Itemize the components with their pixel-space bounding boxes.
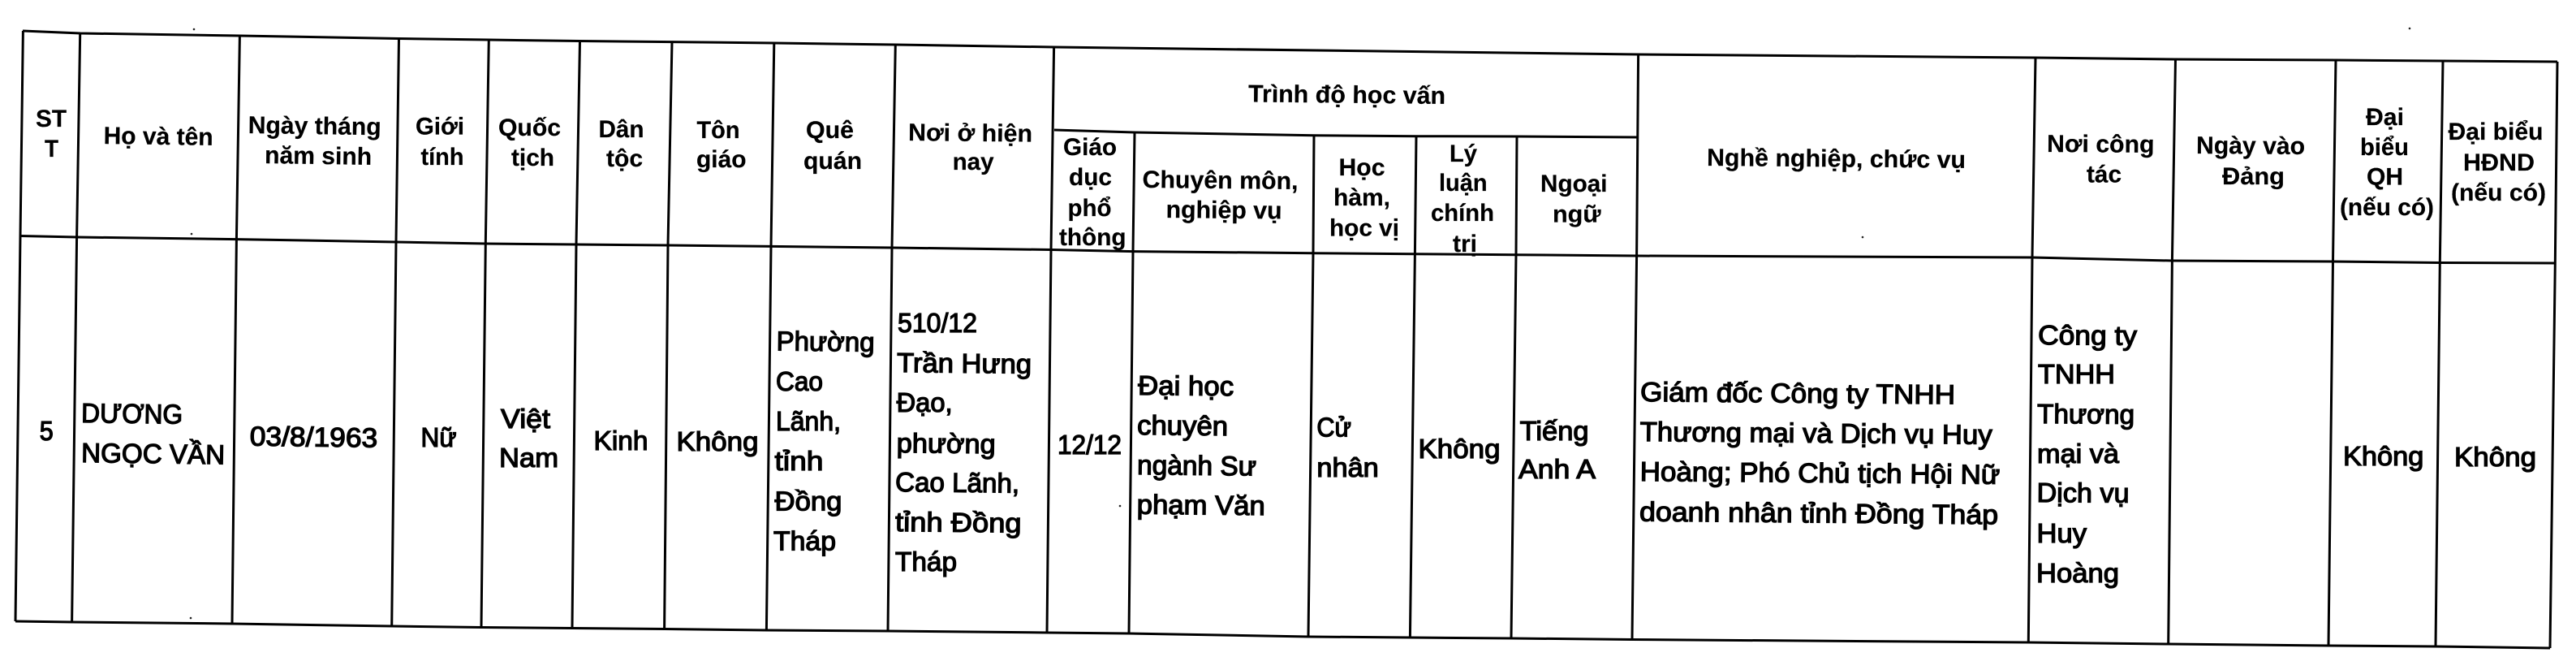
- cell: occupation and position: doanh nhân tỉnh Đồng Tháp: [1639, 498, 1998, 530]
- cell: nationality: [499, 404, 558, 473]
- cell: current residence: Đạo,: [897, 388, 953, 418]
- header: religion: giáo: [696, 146, 747, 173]
- header: hometown: quán: [803, 148, 862, 175]
- sub-header: general education: [1059, 134, 1126, 251]
- header: national assembly delegate: QH: [2367, 164, 2403, 190]
- sub-header: political theory: Lý: [1450, 140, 1477, 167]
- header: ethnicity: [599, 116, 644, 172]
- cell: nationality: Việt: [501, 404, 551, 434]
- sub-header: specialization: Chuyên môn,: [1142, 166, 1299, 195]
- cell: political theory: Không: [1419, 434, 1500, 465]
- cell: hometown: Đồng: [774, 487, 842, 517]
- header: current residence: Nơi ở hiện: [908, 119, 1032, 148]
- sub-header: political theory: chính: [1431, 200, 1494, 227]
- header: people's council delegate: HĐND: [2463, 149, 2535, 176]
- cell: hometown: [773, 326, 875, 557]
- header: ethnicity: tộc: [606, 145, 643, 172]
- table data row: [40, 309, 2536, 589]
- cell: workplace: Huy: [2037, 519, 2087, 549]
- cell: current residence: phường: [897, 429, 996, 460]
- cell: hometown: Tháp: [773, 526, 836, 557]
- cell: name: NGỌC VẦN: [81, 438, 225, 470]
- cell: workplace: Dịch vụ: [2036, 478, 2130, 509]
- header: ethnicity: Dân: [599, 116, 644, 143]
- header: hometown: Quê: [806, 117, 854, 144]
- cell: hometown: tỉnh: [774, 447, 823, 477]
- cell: workplace: Thương: [2037, 400, 2134, 430]
- cell: general education: 12/12: [1058, 430, 1122, 460]
- cell: occupation and position: [1639, 378, 2000, 530]
- sub-header: political theory: luận: [1439, 170, 1487, 197]
- header: gender: [416, 114, 464, 171]
- header: occupation and position: Nghề nghiệp, chức vụ: [1707, 145, 1966, 174]
- cell: workplace: Hoàng: [2036, 559, 2119, 589]
- header: national assembly delegate: [2340, 104, 2434, 221]
- table header row: [36, 80, 2546, 257]
- cell: current residence: Tháp: [895, 547, 957, 577]
- cell: academic degree: nhân: [1316, 453, 1379, 483]
- header: people's council delegate: [2448, 119, 2546, 206]
- header: education group: Trình độ học vấn: [1248, 80, 1445, 110]
- header: national assembly delegate: Đại: [2366, 104, 2404, 131]
- cell: ethnicity: Kinh: [594, 426, 648, 456]
- header: party admission date: [2196, 132, 2305, 190]
- header: nationality: tịch: [511, 145, 554, 171]
- cell: workplace: [2036, 321, 2137, 589]
- header: religion: Tôn: [696, 117, 740, 144]
- cell: occupation and position: Thương mại và Dịch vụ Huy: [1640, 417, 1992, 451]
- cell: current residence: tỉnh Đồng: [895, 508, 1022, 539]
- header: gender: Giới: [416, 114, 464, 140]
- sub-header: political theory: trị: [1453, 231, 1477, 257]
- cell: religion: Không: [677, 427, 758, 457]
- cell: hometown: Phường: [776, 326, 875, 358]
- cell: occupation and position: Giám đốc Công ty TNHH: [1640, 378, 1955, 410]
- cell: current residence: Cao Lãnh,: [895, 468, 1019, 499]
- header: date of birth: năm sinh: [265, 142, 372, 171]
- header: gender: tính: [420, 144, 464, 171]
- cell: national assembly delegate: Không: [2343, 442, 2423, 472]
- sub-header: foreign language: Ngoại: [1540, 171, 1607, 197]
- cell: workplace: mại và: [2037, 439, 2119, 469]
- cell: foreign language: Tiếng: [1520, 417, 1589, 447]
- header: national assembly delegate: (nếu có): [2340, 194, 2434, 221]
- sub-header: general education: dục: [1069, 164, 1112, 191]
- header: workplace: Nơi công: [2047, 131, 2155, 158]
- cell: name: [81, 399, 225, 470]
- cell: occupation and position: Hoàng; Phó Chủ tịch Hội Nữ: [1640, 457, 2000, 491]
- header: current residence: [908, 119, 1032, 175]
- cell: nationality: Nam: [499, 443, 558, 473]
- cell: current residence: [895, 309, 1032, 577]
- header: STT: [36, 106, 67, 162]
- cell: workplace: Công ty: [2038, 321, 2137, 352]
- sub-header: specialization: [1142, 166, 1299, 224]
- sub-header: academic title: hàm,: [1333, 184, 1390, 211]
- header: current residence: nay: [953, 149, 994, 175]
- cell: gender: Nữ: [420, 423, 456, 453]
- cell: specialization: chuyên: [1137, 411, 1228, 442]
- sub-header: foreign language: ngữ: [1553, 201, 1601, 227]
- header: people's council delegate: Đại biểu: [2448, 119, 2544, 145]
- header: STT: T: [45, 136, 58, 162]
- header: nationality: Quốc: [498, 115, 561, 141]
- sub-header: academic title: [1329, 154, 1399, 242]
- cell: specialization: ngành Sư: [1137, 451, 1256, 482]
- sub-header: general education: phổ: [1068, 195, 1112, 222]
- header: full name: Họ và tên: [103, 123, 213, 151]
- cell: foreign language: [1518, 417, 1596, 485]
- sub-header: political theory: [1431, 140, 1494, 257]
- cell: current residence: 510/12: [898, 309, 977, 339]
- cell: academic degree: Cử: [1316, 413, 1351, 443]
- cell: specialization: [1137, 371, 1265, 521]
- header: national assembly delegate: biểu: [2360, 134, 2409, 161]
- cell: academic degree: [1316, 413, 1379, 483]
- header: party admission date: Đảng: [2222, 163, 2285, 190]
- cell: specialization: phạm Văn: [1137, 491, 1265, 521]
- header: workplace: tác: [2087, 161, 2122, 188]
- cell: specialization: Đại học: [1138, 371, 1234, 402]
- header: religion: [696, 117, 747, 173]
- cell: hometown: Lãnh,: [776, 407, 841, 437]
- sub-header: general education: Giáo: [1063, 134, 1117, 161]
- sub-header: specialization: nghiệp vụ: [1165, 197, 1282, 224]
- cell: people's council delegate: Không: [2454, 443, 2536, 473]
- cell: current residence: Trần Hưng: [897, 348, 1032, 380]
- sub-header: general education: thông: [1059, 224, 1126, 251]
- header: STT: ST: [36, 106, 67, 132]
- header: people's council delegate: (nếu có): [2451, 179, 2546, 206]
- sub-header: academic title: học vị: [1329, 214, 1399, 242]
- header: date of birth: Ngày tháng: [248, 112, 381, 140]
- sub-header: academic title: Học: [1339, 154, 1385, 181]
- cell: date of birth: 03/8/1963: [249, 422, 377, 454]
- cell: foreign language: Anh A: [1518, 455, 1596, 485]
- header: nationality: [498, 115, 561, 171]
- cell: name: DƯƠNG: [81, 399, 183, 430]
- cell: number: 5: [40, 417, 54, 447]
- header: party admission date: Ngày vào: [2196, 132, 2305, 160]
- cell: hometown: Cao: [776, 367, 823, 397]
- header: workplace: [2047, 131, 2155, 188]
- sub-header: foreign language: [1540, 171, 1607, 227]
- header: date of birth: [248, 112, 381, 171]
- header: hometown: [803, 117, 862, 175]
- cell: workplace: TNHH: [2038, 360, 2115, 390]
